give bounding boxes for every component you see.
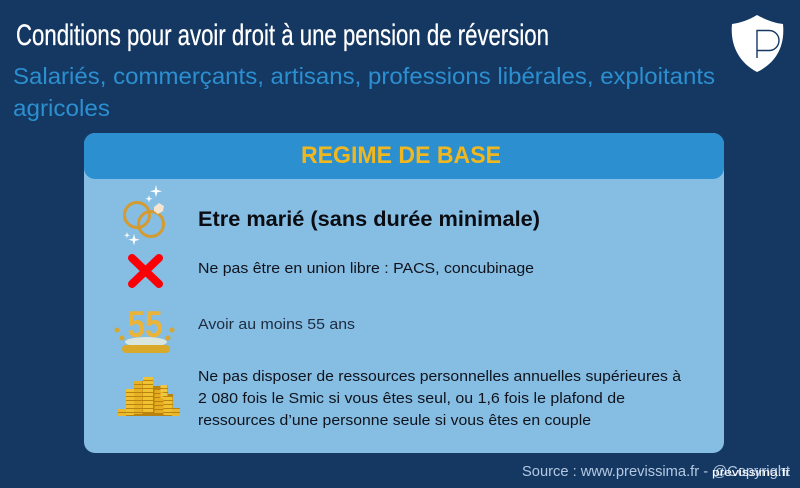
icon: 55 gold badge [114, 304, 174, 353]
source line: Source : www.previssima.fr - @Copyright [522, 463, 791, 480]
watermark: previssima.fr [712, 467, 790, 479]
text: ressources [198, 368, 682, 429]
icon: red cross [132, 258, 159, 284]
subtitle: Salariés, commerçants, artisans, professions libérales, exploitants [13, 63, 715, 89]
title: Conditions pour avoir droit à une pension de réversion [16, 19, 549, 52]
text: âge: Avoir au moins 55 ans [198, 316, 355, 333]
panel header [84, 133, 724, 179]
icon: 55 gold badge: 55 [128, 304, 162, 345]
text: ressources: 2 080 fois le Smic si vous êtes seul, ou 1,6 fois le plafond de [198, 390, 625, 407]
icon: shield logo [732, 15, 783, 72]
heading: REGIME DE BASE [301, 142, 501, 169]
text: ressources: ressources d’une personne seule si vous êtes en couple [198, 412, 591, 429]
panel: régime de base [84, 133, 724, 453]
text: ressources: Ne pas disposer de ressources personnelles annuelles supérieures à [198, 368, 682, 385]
icon: wedding rings [124, 185, 164, 245]
text: être marié: Etre marié (sans durée minimale) [198, 208, 540, 231]
subtitle: agricoles [13, 95, 110, 121]
icon: gold coins [118, 377, 180, 416]
subtitle [13, 63, 715, 121]
text: union libre: Ne pas être en union libre : PACS, concubinage [198, 260, 534, 277]
